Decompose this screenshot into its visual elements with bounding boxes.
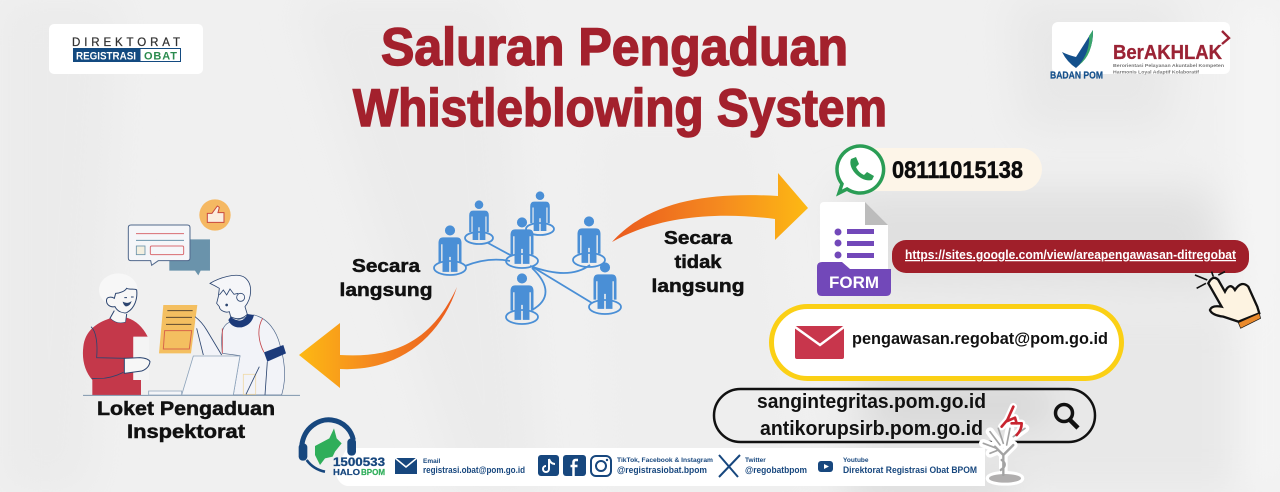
- search bar with integrity sites: sangintegritas.pom.go.id: [757, 391, 986, 413]
- logo: Direktorat Registrasi Obat: OBAT: [144, 50, 177, 62]
- person: left, red sweater: [83, 273, 150, 395]
- person icons: [438, 191, 616, 320]
- arrow: to left counter: [299, 287, 457, 388]
- label: Loket Pengaduan Inspektorat: Loket Pengaduan: [97, 399, 275, 420]
- YouTube contact: [818, 457, 977, 476]
- person: right, white shirt: [195, 275, 286, 395]
- link pill: [892, 240, 1249, 273]
- email contact: registrasi.obat@pom.go.id: [423, 465, 525, 476]
- email contact: [395, 458, 525, 476]
- social icons: TikTok, Facebook, Instagram: TikTok, Facebook & Instagram: [617, 457, 713, 464]
- WhatsApp number pill: [837, 146, 1042, 193]
- illustration: two people at complaint counter: [83, 199, 300, 395]
- label: Loket Pengaduan Inspektorat: Inspektorat: [127, 422, 246, 443]
- link pill: https://sites.google.com/view/areapengawasan-ditregobat: [905, 248, 1237, 262]
- Twitter contact: @regobatbpom: [745, 465, 807, 476]
- icon: envelope: [795, 326, 844, 359]
- network links: [434, 223, 621, 324]
- title: Saluran Pengaduan: [381, 18, 848, 77]
- logo: Halo BPOM headset: BPOM: [361, 467, 385, 477]
- Twitter contact: [719, 455, 807, 477]
- icon: form document: [817, 202, 891, 296]
- icon: thumbs up: [199, 199, 231, 231]
- logo: Badan POM and BerAKHLAK: BerAKHLAK: [1113, 42, 1223, 64]
- document held: [159, 305, 197, 353]
- WhatsApp number pill: 08111015138: [892, 157, 1023, 184]
- logo: Halo BPOM headset: [299, 420, 385, 477]
- label: Secara langsung: langsung: [340, 279, 432, 300]
- logo: Direktorat Registrasi Obat: [49, 24, 203, 74]
- anniversary statuette: [983, 407, 1025, 483]
- email pill: pengawasan.regobat@pom.go.id: [852, 329, 1108, 348]
- network of people: [434, 191, 621, 324]
- title: Whistleblowing System: [353, 79, 887, 138]
- label: Secara tidak langsung: tidak: [674, 251, 722, 272]
- label: Secara tidak langsung: [652, 227, 744, 296]
- laptop and desk: [83, 356, 300, 395]
- social icons: TikTok, Facebook, Instagram: [538, 455, 713, 476]
- logo: Halo BPOM headset: 1500533: [333, 455, 385, 469]
- speech bubbles: [128, 225, 210, 275]
- footer contact strip: [299, 420, 985, 486]
- icon: magnifier: [1056, 404, 1078, 428]
- icon: pointing hand: [1195, 272, 1261, 328]
- label: Secara tidak langsung: Secara: [664, 227, 733, 248]
- social icons: TikTok, Facebook, Instagram: @registrasiobat.bpom: [617, 465, 707, 476]
- logo: Badan POM and BerAKHLAK: BADAN POM: [1050, 70, 1103, 82]
- red numeral emblem: [1002, 407, 1022, 435]
- icon: form document: FORM: [829, 274, 879, 292]
- logo: Badan POM and BerAKHLAK: Berorientasi Pelayanan Akuntabel Kompeten: [1113, 63, 1224, 68]
- YouTube contact: Youtube: [843, 457, 869, 464]
- logo: Halo BPOM headset: HALO: [333, 467, 360, 477]
- arrow: to contact channels: [612, 173, 808, 242]
- email contact: Email: [423, 458, 441, 465]
- statuette white outline: [983, 407, 1025, 483]
- search bar with integrity sites: [714, 389, 1095, 442]
- email pill: [772, 306, 1122, 378]
- YouTube contact: Direktorat Registrasi Obat BPOM: [843, 465, 977, 476]
- label: Secara langsung: [340, 255, 432, 300]
- logo: Badan POM and BerAKHLAK: [1050, 22, 1230, 82]
- label: Loket Pengaduan Inspektorat: [97, 399, 275, 443]
- Twitter contact: Twitter: [745, 457, 766, 464]
- label: Secara tidak langsung: langsung: [652, 275, 744, 296]
- icon: WhatsApp: [837, 146, 884, 193]
- statuette figure: [983, 428, 1025, 483]
- logo: Direktorat Registrasi Obat: REGISTRASI: [76, 50, 136, 62]
- title: [353, 18, 887, 138]
- logo: Badan POM and BerAKHLAK: Harmonis Loyal Adaptif Kolaboratif: [1113, 70, 1200, 74]
- search bar with integrity sites: antikorupsirb.pom.go.id: [760, 418, 983, 440]
- logo: Direktorat Registrasi Obat: DIREKTORAT: [72, 37, 180, 49]
- label: Secara langsung: Secara: [352, 255, 421, 276]
